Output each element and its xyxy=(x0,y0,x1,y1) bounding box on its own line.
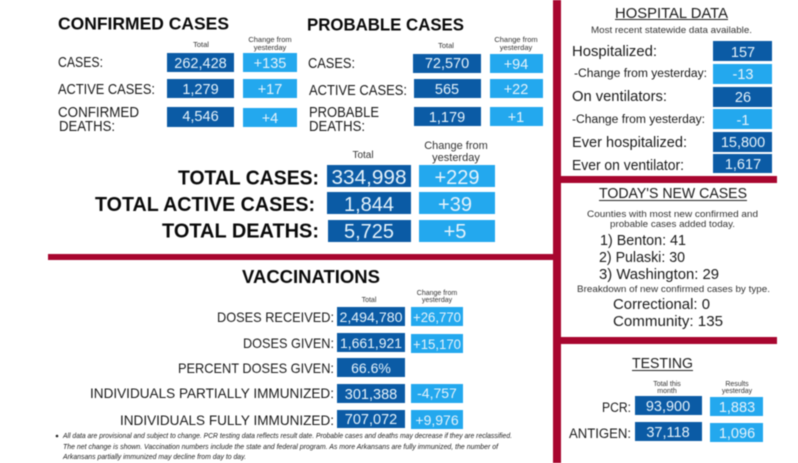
row: percent doses given: PERCENT DOSES GIVEN: xyxy=(178,360,334,376)
text: breakdown intro: Breakdown of new confirmed cases by type. xyxy=(577,284,770,294)
row: hospitalized: 157 xyxy=(731,45,755,61)
column header: total this month: month xyxy=(657,388,677,395)
row: active cases: ACTIVE CASES: xyxy=(309,83,407,99)
row: cases xyxy=(308,54,543,73)
row: confirmed deaths: +4 xyxy=(262,111,278,127)
row: active cases: ACTIVE CASES: xyxy=(58,82,155,98)
panel: testing xyxy=(569,355,763,442)
footnote: All data are provisional and subject to change. PCR testing data reflects result date. Probable cases and deaths may decrease if they are reclassified. xyxy=(62,433,512,440)
row: total cases: TOTAL CASES: xyxy=(178,168,319,190)
heading: probable cases: PROBABLE CASES xyxy=(307,14,464,34)
row: antigen: 1,096 xyxy=(719,426,755,442)
row: active cases xyxy=(58,79,297,98)
row: cases: +94 xyxy=(504,57,528,73)
row: change in hospitalized: -13 xyxy=(733,67,753,83)
row: change in hospitalized: -Change from yesterday: xyxy=(574,68,707,80)
text: counties intro: probable cases added today. xyxy=(610,219,735,229)
heading: today's new cases: TODAY'S NEW CASES xyxy=(599,186,747,202)
list: top counties: 2) Pulaski: 30 xyxy=(599,249,685,266)
row: individuals fully immunized: 707,072 xyxy=(345,412,397,428)
heading: hospital data: HOSPITAL DATA xyxy=(615,5,728,22)
column header: change from yesterday: Change from xyxy=(417,290,457,297)
row: cases: 72,570 xyxy=(425,56,469,72)
column header: total: Total xyxy=(362,297,377,304)
row: hospitalized xyxy=(572,41,772,61)
row: total deaths xyxy=(162,220,495,243)
row: doses received: +26,770 xyxy=(413,309,461,325)
row: confirmed deaths: DEATHS: xyxy=(59,119,115,135)
column header: change from yesterday: yesterday xyxy=(254,43,287,52)
row: individuals fully immunized xyxy=(120,410,463,429)
column header: change from yesterday: Change from xyxy=(494,35,538,44)
column header: change from yesterday: yesterday xyxy=(432,152,480,164)
row: on ventilators: On ventilators: xyxy=(572,88,667,105)
row: ever on ventilator xyxy=(572,154,772,174)
panel: confirmed cases xyxy=(58,14,297,135)
row: active cases: 1,279 xyxy=(182,82,219,98)
row: pcr xyxy=(602,396,763,416)
row: pcr: 1,883 xyxy=(719,400,755,416)
row: probable deaths: PROBABLE xyxy=(309,105,379,121)
row: individuals partially immunized: -4,757 xyxy=(417,385,457,401)
row: ever on ventilator: Ever on ventilator: xyxy=(572,158,684,174)
row: probable deaths: DEATHS: xyxy=(309,119,365,135)
footnote xyxy=(56,433,512,461)
row: total active cases xyxy=(95,192,495,216)
column header: total: Total xyxy=(438,41,454,50)
column header: total: Total xyxy=(193,40,209,49)
column header: total: Total xyxy=(352,150,374,161)
row: total cases xyxy=(178,165,495,190)
row: total cases: +229 xyxy=(434,167,480,189)
row: ever on ventilator: 1,617 xyxy=(725,157,761,173)
row: active cases: +22 xyxy=(504,82,528,98)
row: on ventilators xyxy=(572,87,772,107)
panel: hospital data xyxy=(572,5,772,174)
row: active cases xyxy=(309,79,543,99)
row: cases: 262,428 xyxy=(174,56,227,72)
row: total active cases: 1,844 xyxy=(344,194,394,216)
row: pcr: PCR: xyxy=(602,400,631,415)
row: change in ventilators xyxy=(572,109,772,129)
row: probable deaths xyxy=(309,105,543,135)
panel: probable cases xyxy=(307,14,543,135)
footnote: Arkansans partially immunized may decline from day to day. xyxy=(62,454,246,461)
row: antigen: 37,118 xyxy=(646,425,690,441)
panel: today's new cases xyxy=(577,186,770,330)
panel: totals xyxy=(95,140,495,243)
row: total deaths: 5,725 xyxy=(344,221,394,243)
row: cases xyxy=(58,53,297,72)
heading: testing: TESTING xyxy=(632,355,693,372)
row: change in ventilators: -1 xyxy=(737,113,749,129)
row: total deaths: TOTAL DEATHS: xyxy=(162,220,319,242)
row: confirmed deaths xyxy=(58,105,297,135)
row: probable deaths: +1 xyxy=(508,110,524,126)
row: individuals partially immunized xyxy=(90,384,463,403)
list: top counties: 1) Benton: 41 xyxy=(600,232,686,249)
column header: results yesterday: Results xyxy=(725,381,749,388)
row: total active cases: TOTAL ACTIVE CASES: xyxy=(95,194,315,216)
column header: results yesterday: yesterday xyxy=(722,388,753,395)
row: ever hospitalized: Ever hospitalized: xyxy=(572,134,687,151)
list: case types xyxy=(613,296,723,330)
row: ever hospitalized xyxy=(572,132,772,152)
row: individuals fully immunized: +9,976 xyxy=(415,412,459,428)
heading: confirmed cases: CONFIRMED CASES xyxy=(58,14,229,34)
row: confirmed deaths: CONFIRMED xyxy=(58,105,139,121)
row: doses given: +15,170 xyxy=(413,336,461,352)
row: ever hospitalized: 15,800 xyxy=(721,135,765,151)
footnote: The net change is shown. Vaccination numbers include the state and federal program. As more Arkansans are fully immunized, the number of xyxy=(63,444,499,451)
row: doses received: DOSES RECEIVED: xyxy=(217,309,334,325)
row: active cases: 565 xyxy=(435,82,459,98)
row: antigen: ANTIGEN: xyxy=(569,426,631,441)
row: individuals fully immunized: INDIVIDUALS FULLY IMMUNIZED: xyxy=(120,412,334,428)
list: top counties xyxy=(599,232,719,283)
column header: change from yesterday: yesterday xyxy=(500,43,533,52)
row: cases: +135 xyxy=(254,56,286,72)
row: doses received: 2,494,780 xyxy=(340,309,403,325)
row: doses received xyxy=(217,307,463,326)
list: case types: Correctional: 0 xyxy=(613,296,710,313)
row: individuals partially immunized: INDIVIDUALS PARTIALLY IMMUNIZED: xyxy=(90,385,334,401)
row: total active cases: +39 xyxy=(438,194,472,216)
text: counties intro: Counties with most new confirmed and xyxy=(587,209,758,219)
heading: vaccinations: VACCINATIONS xyxy=(242,267,380,287)
row: total deaths: +5 xyxy=(444,221,466,243)
row: antigen xyxy=(569,422,763,442)
column header: change from yesterday: Change from xyxy=(248,35,292,44)
column header: change from yesterday: yesterday xyxy=(422,297,453,304)
row: on ventilators: 26 xyxy=(735,90,751,106)
row: total cases: 334,998 xyxy=(332,167,406,189)
list: case types: Community: 135 xyxy=(613,313,723,330)
column header: change from yesterday: Change from xyxy=(424,140,488,152)
column header: total this month: Total this xyxy=(653,381,681,388)
subheading: Most recent statewide data available. xyxy=(591,25,752,35)
row: doses given xyxy=(243,333,463,353)
row: cases: CASES: xyxy=(58,55,103,71)
row: cases: CASES: xyxy=(308,56,355,72)
row: percent doses given xyxy=(178,358,405,377)
row: pcr: 93,900 xyxy=(646,399,690,415)
row: percent doses given: 66.6% xyxy=(351,360,391,376)
row: active cases: +17 xyxy=(258,82,282,98)
panel: vaccinations xyxy=(90,267,463,429)
row: change in hospitalized xyxy=(574,64,772,84)
row: probable deaths: 1,179 xyxy=(429,110,465,126)
row: hospitalized: Hospitalized: xyxy=(572,43,657,60)
row: individuals partially immunized: 301,388 xyxy=(345,387,397,403)
row: doses given: 1,661,921 xyxy=(340,335,402,351)
row: change in ventilators: -Change from yesterday: xyxy=(572,114,705,126)
text: counties intro xyxy=(587,209,758,229)
row: confirmed deaths: 4,546 xyxy=(182,109,219,125)
row: doses given: DOSES GIVEN: xyxy=(243,335,334,351)
list: top counties: 3) Washington: 29 xyxy=(599,266,719,283)
